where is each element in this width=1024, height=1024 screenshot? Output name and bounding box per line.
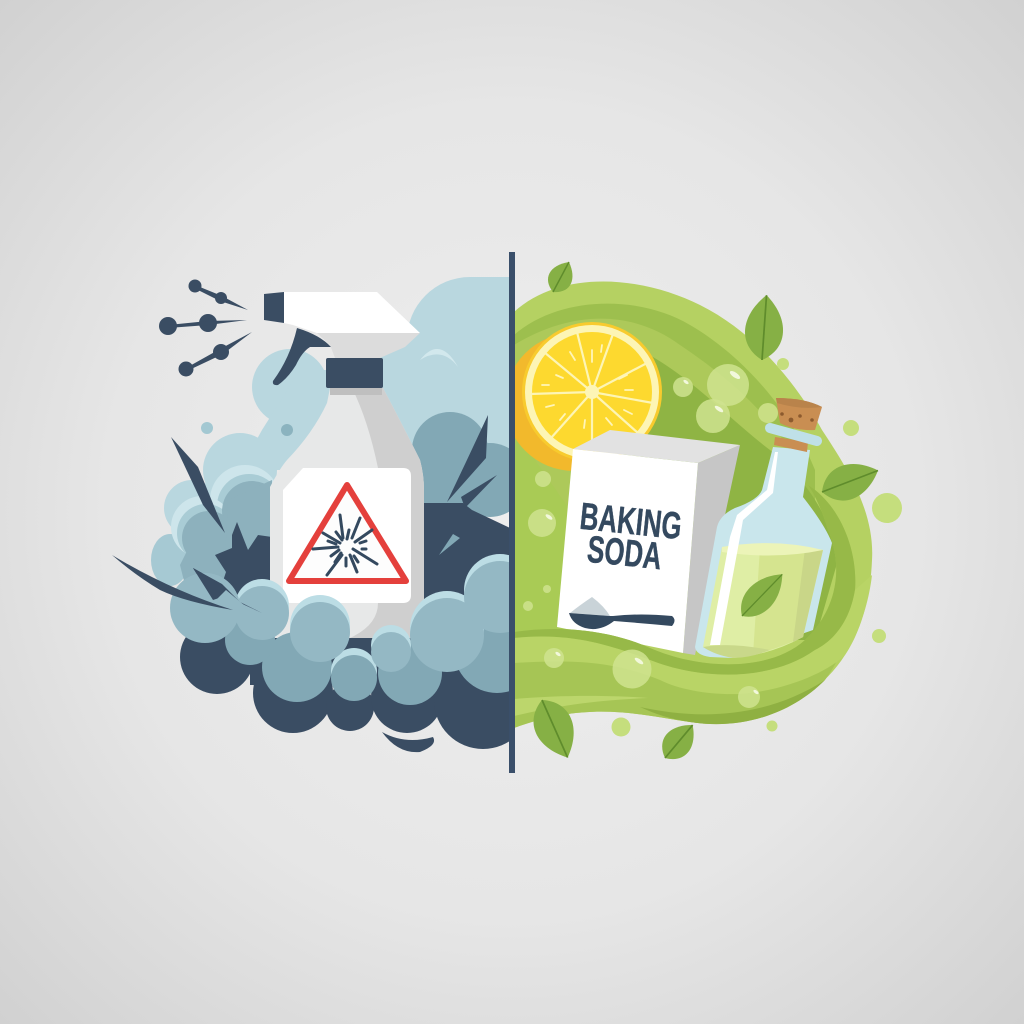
swirl lower left (514, 430, 570, 640)
baking soda box (557, 430, 740, 655)
liquid mid band (753, 548, 815, 655)
bottle bottom (703, 645, 770, 658)
ribbon dark inner band (514, 485, 855, 675)
sprayer neck (317, 333, 420, 358)
explosion symbol (313, 515, 377, 575)
trigger (273, 328, 331, 385)
leaf top right (743, 294, 785, 361)
front ribbon of swirl (514, 485, 855, 728)
vapour highlight (420, 349, 458, 367)
leaves (525, 256, 884, 767)
leaf bottom centre (654, 716, 703, 767)
lemon rind side (505, 333, 643, 471)
bottle leaf label (732, 565, 792, 626)
box side (683, 445, 740, 655)
pale vapour cloud (151, 277, 533, 586)
warning label (283, 468, 411, 603)
ribbon accent (514, 696, 648, 716)
box front (557, 449, 698, 653)
glass highlight (710, 452, 778, 645)
bottle cap (326, 358, 383, 388)
liquid shade (793, 549, 823, 642)
bubbles (523, 364, 760, 708)
bubble highlights (545, 370, 759, 695)
sprayer head (284, 292, 420, 333)
centre low lobe (331, 655, 377, 701)
leaf bottom left (525, 692, 585, 765)
cork top (776, 398, 822, 408)
leaf right (816, 454, 884, 508)
teal left smoke lobes (180, 480, 272, 580)
lemon pulp dashes (542, 345, 633, 428)
lemon segment membranes (530, 332, 653, 454)
bottle lip (770, 428, 817, 441)
dark star over smoke (193, 568, 262, 613)
bottle liquid (703, 544, 823, 658)
ribbon bottom shadow (640, 680, 825, 724)
green swirl background (514, 281, 872, 728)
cork lower (774, 437, 808, 452)
lemon rim (522, 322, 662, 462)
hazard triangle (289, 485, 406, 581)
cork specks (780, 412, 814, 422)
centre divider (509, 252, 515, 773)
bottle body (270, 388, 424, 638)
spoon with powder (569, 597, 674, 629)
dark smoke cloud (180, 636, 509, 749)
nozzle (264, 292, 284, 323)
lemon flesh (532, 332, 652, 452)
box label text: SODA (585, 528, 664, 578)
mid front smoke (225, 622, 509, 705)
bottle shading (350, 388, 424, 638)
lemon (505, 322, 662, 471)
highlight rims on left smoke (171, 465, 274, 552)
ribbon light band (514, 575, 872, 694)
pale shard (218, 590, 244, 604)
liquid surface (722, 543, 823, 556)
navy patch left of bottle (193, 522, 270, 595)
outer bubbles (612, 358, 902, 736)
box label text: BAKING (578, 495, 684, 547)
navy shards (171, 415, 497, 533)
panel: natural cleaner side (505, 281, 872, 728)
cork (776, 398, 822, 430)
swoosh under cloud (382, 732, 434, 752)
box label text (575, 495, 684, 579)
spray bottle (264, 292, 424, 638)
cap shadow (330, 388, 382, 395)
box top (573, 430, 740, 463)
smoke rims (238, 554, 509, 676)
swirl dark layer (640, 350, 838, 640)
bottle glass (695, 447, 832, 658)
glass bottle (695, 398, 832, 658)
front smoke puffs (170, 561, 536, 672)
leaf top left (543, 256, 579, 298)
small smoke droplets (201, 422, 293, 436)
long shard (112, 555, 233, 610)
teal upper smoke (412, 412, 509, 517)
swirl mid layer (515, 304, 815, 500)
navy patch right of bottle (424, 503, 509, 599)
small teal shard (439, 534, 460, 555)
panel: chemical cleaner side (112, 277, 540, 752)
lemon centre (585, 385, 599, 399)
swirl inner layer (515, 318, 787, 506)
lemon pith (525, 325, 659, 459)
spray particles (159, 280, 252, 376)
bubble behind bottle (758, 403, 778, 423)
